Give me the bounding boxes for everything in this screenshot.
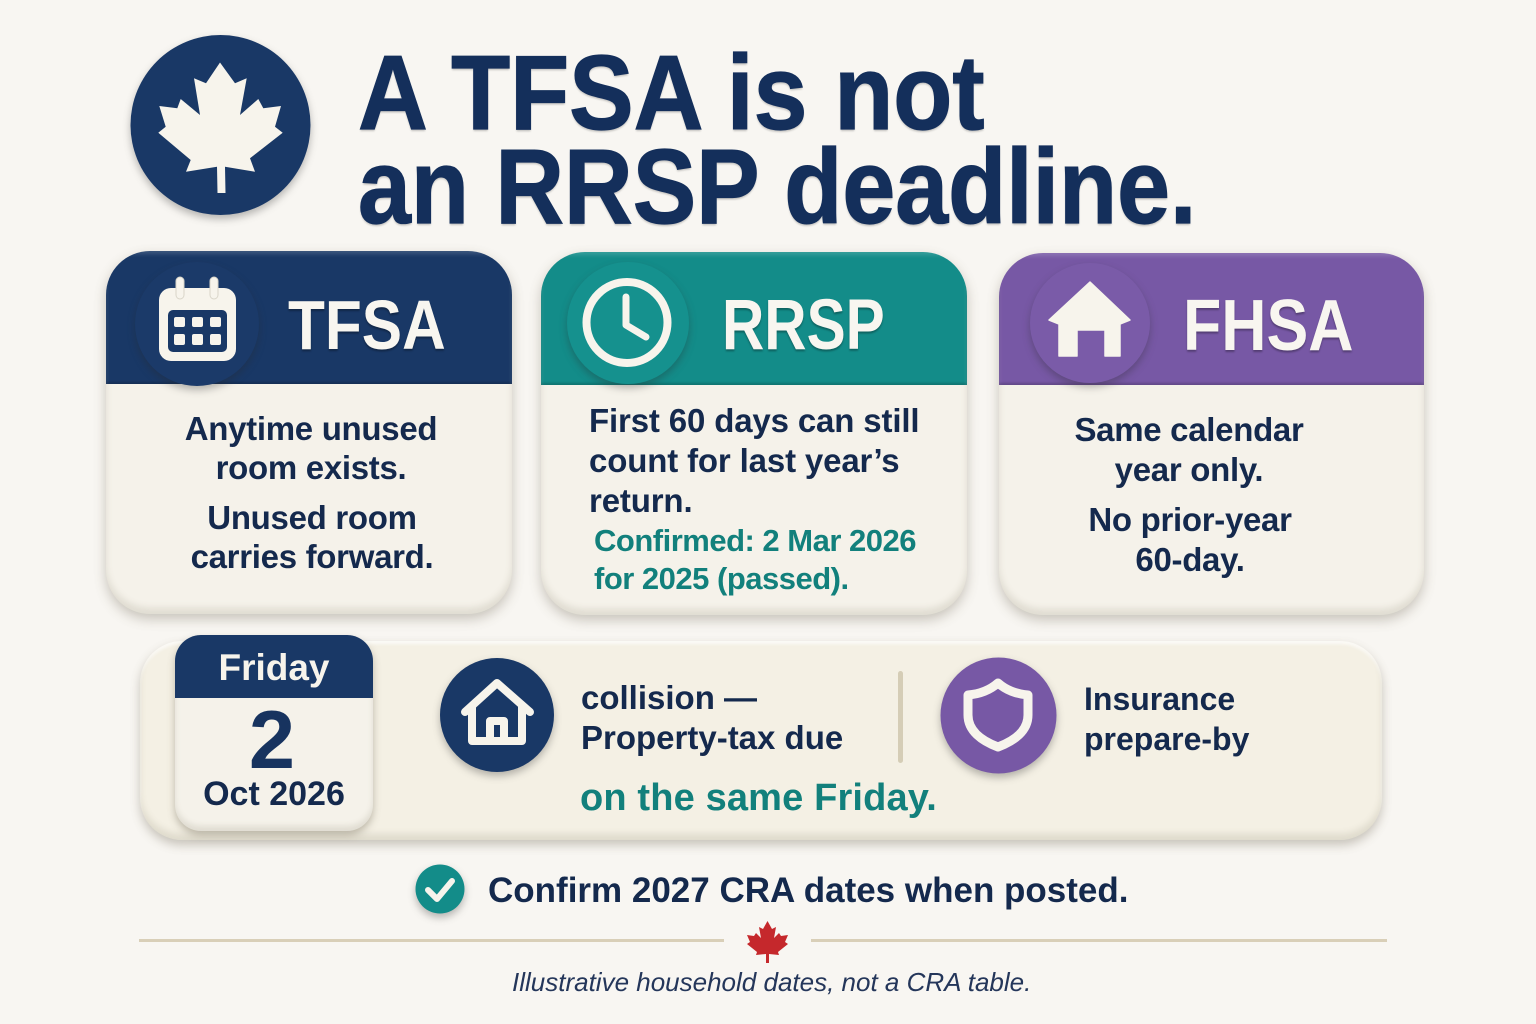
FHSA text xyxy=(1074,411,1304,488)
panel: RRSP xyxy=(541,252,967,615)
FHSA second text: No prior-year xyxy=(1088,501,1292,538)
RRSP text: First 60 days can still xyxy=(589,402,919,439)
confirm note: Confirm 2027 CRA dates when posted. xyxy=(488,871,1128,910)
icon: calendar xyxy=(134,276,260,394)
FHSA text: Same calendar xyxy=(1074,411,1304,448)
tile month: Oct 2026 xyxy=(203,775,345,813)
RRSP heading: RRSP xyxy=(722,286,885,365)
FHSA text: year only. xyxy=(1115,451,1263,488)
footnote: Illustrative household dates, not a CRA table. xyxy=(512,967,1031,997)
TFSA carry text xyxy=(191,499,433,575)
title xyxy=(358,34,1196,246)
FHSA heading: FHSA xyxy=(1183,286,1354,366)
collision text xyxy=(581,679,843,756)
collision text: collision — xyxy=(581,679,757,716)
tile day: 2 xyxy=(249,693,295,786)
TFSA header xyxy=(106,251,512,384)
insurance text xyxy=(1084,681,1250,757)
TFSA heading: TFSA xyxy=(288,286,446,364)
icon: check xyxy=(412,864,468,922)
rule left xyxy=(139,939,724,942)
tile weekday: Friday xyxy=(218,647,330,688)
icon: clock xyxy=(564,278,692,392)
RRSP header xyxy=(541,252,967,385)
insurance text: Insurance xyxy=(1084,681,1235,717)
panel: TFSA xyxy=(106,251,512,614)
FHSA second text xyxy=(1088,501,1292,578)
RRSP text xyxy=(589,402,919,519)
collision text: Property-tax due xyxy=(581,719,843,756)
icon: house xyxy=(1027,278,1153,391)
icon: red maple leaf xyxy=(747,921,788,963)
RRSP confirmed: Confirmed: 2 Mar 2026 xyxy=(594,523,916,558)
FHSA second text: 60-day. xyxy=(1135,541,1245,578)
insurance text: prepare-by xyxy=(1084,721,1249,757)
title: an RRSP deadline. xyxy=(358,128,1196,246)
panel: FHSA xyxy=(999,253,1424,615)
TFSA carry text: carries forward. xyxy=(191,538,433,575)
RRSP text: count for last year’s xyxy=(589,442,899,479)
title: A TFSA is not xyxy=(358,34,985,152)
icon: maple leaf badge xyxy=(126,34,314,223)
divider xyxy=(898,671,903,763)
same Friday text: on the same Friday. xyxy=(580,777,937,819)
TFSA text xyxy=(185,410,437,486)
panel: collision band xyxy=(140,641,1382,840)
RRSP text: return. xyxy=(589,482,692,519)
rule right xyxy=(811,939,1387,942)
calendar tile xyxy=(175,635,373,831)
TFSA text: room exists. xyxy=(216,449,406,486)
RRSP confirmed xyxy=(594,523,916,596)
tile header xyxy=(175,635,373,698)
icon: house badge xyxy=(436,658,558,780)
RRSP confirmed: for 2025 (passed). xyxy=(594,561,849,596)
icon: shield badge xyxy=(936,658,1060,782)
FHSA header xyxy=(999,253,1424,385)
TFSA carry text: Unused room xyxy=(207,499,417,536)
TFSA text: Anytime unused xyxy=(185,410,437,447)
